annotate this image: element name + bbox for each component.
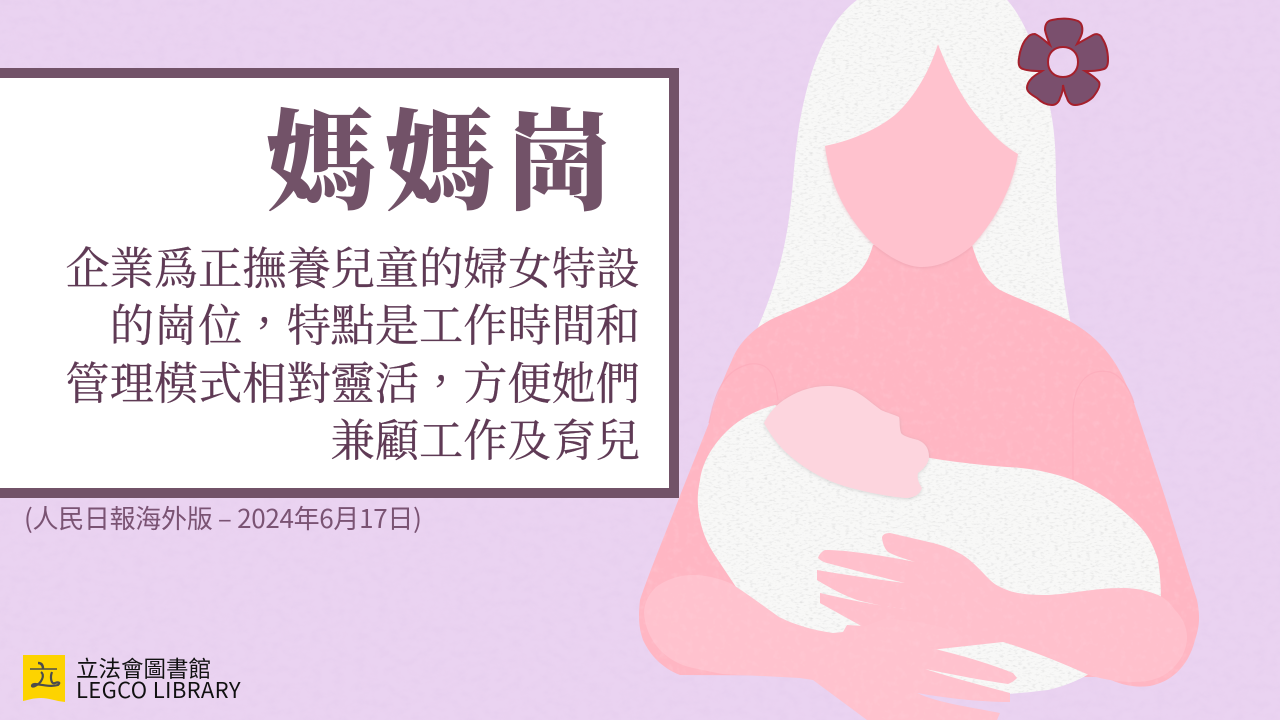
fringe: [809, 0, 1047, 157]
text panel: white box with plum frame: [0, 68, 679, 498]
face: [825, 44, 1018, 267]
logo: LegCo Library: LEGCO LIBRARY: [76, 673, 241, 705]
icon: yellow ribbon emblem: [23, 655, 65, 702]
logo: LegCo Library: [23, 652, 241, 705]
heading: 媽媽崗: [266, 103, 623, 225]
mother's arm and hand: [817, 533, 1187, 682]
hair: [752, 0, 1072, 340]
definition text: 管理模式相對靈活，方便她們: [66, 360, 640, 409]
blanket: [698, 405, 1161, 694]
body: [639, 245, 1199, 687]
definition text: 的崗位，特點是工作時間和: [110, 302, 640, 351]
flower: [1019, 19, 1108, 105]
definition text: 企業爲正撫養兒童的婦女特設: [66, 245, 640, 294]
logo text: 立法會圖書館: [76, 652, 211, 684]
baby head: [764, 386, 929, 498]
source note: (人民日報海外版 – 2024年6月17日): [24, 499, 422, 536]
definition text: [66, 245, 640, 466]
definition text: 兼顧工作及育兒: [331, 417, 640, 466]
lower arm and hand: [644, 575, 1017, 720]
